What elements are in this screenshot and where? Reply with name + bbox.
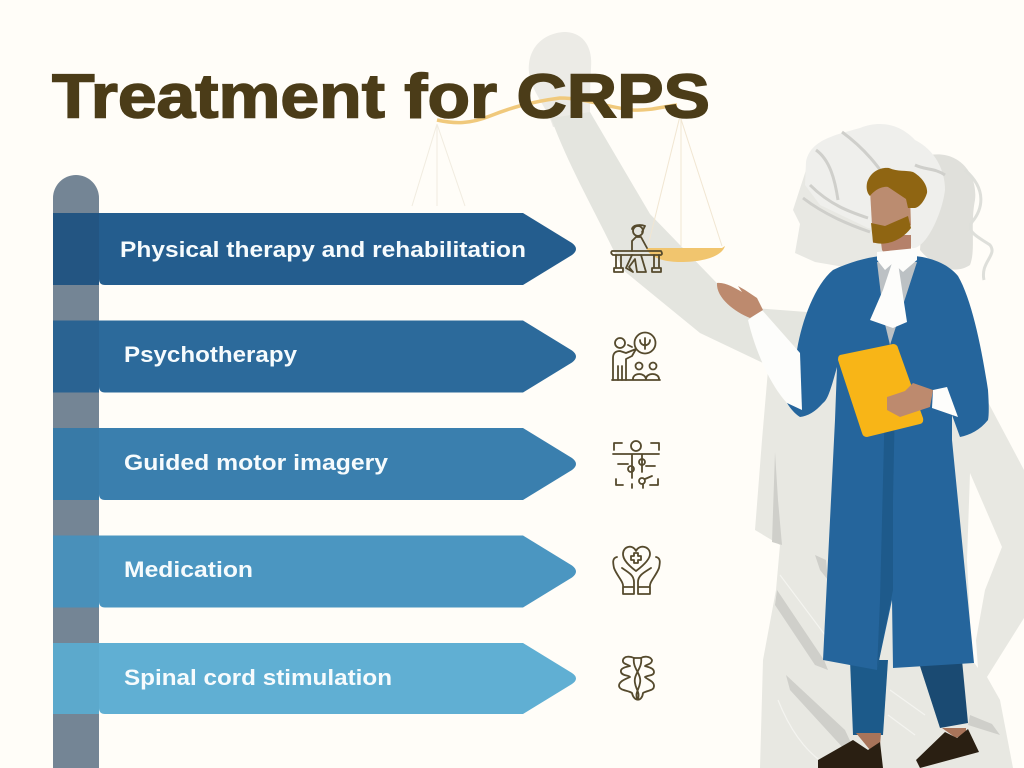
icon: psychotherapy group	[612, 332, 660, 380]
arrow: physical therapy: Physical therapy and rehabilitation	[120, 237, 526, 262]
statue hair strands	[803, 132, 945, 232]
balance scale	[412, 98, 725, 262]
left sleeve cuff	[748, 310, 802, 410]
icon: guided motor imagery body scan	[613, 441, 659, 488]
raised hand	[717, 283, 763, 318]
left shoe	[818, 740, 883, 768]
hand on folder	[887, 383, 933, 417]
signpost pole	[53, 175, 99, 768]
arrow: spinal cord stimulation	[53, 643, 576, 714]
scale beam	[437, 98, 677, 123]
right scale chains	[648, 116, 722, 246]
statue raised hand	[529, 32, 591, 127]
arrow: medication: Medication	[124, 557, 253, 582]
shirt	[877, 262, 917, 345]
statue robe folds	[772, 452, 1000, 750]
statue face	[793, 170, 900, 268]
neck	[880, 235, 911, 262]
left scale chains	[412, 124, 465, 206]
trouser legs	[850, 660, 888, 735]
arrow: guided motor imagery: Guided motor imagery	[124, 450, 389, 475]
right shoe	[916, 729, 979, 768]
arrow: medication	[53, 536, 576, 608]
coat	[787, 256, 989, 670]
jabot	[870, 263, 907, 328]
statue ponytail	[920, 154, 975, 270]
right scale pan	[646, 246, 725, 262]
gap between statue hip arm and body	[967, 473, 1002, 668]
yellow folder	[838, 344, 923, 437]
statue hair	[805, 124, 945, 248]
arrow: psychotherapy: Psychotherapy	[124, 342, 298, 367]
arrow: spinal cord stimulation: Spinal cord stimulation	[124, 665, 392, 690]
face	[870, 187, 911, 243]
arrow: guided motor imagery	[53, 428, 576, 500]
statue body and robe	[755, 300, 1024, 768]
arrow: psychotherapy	[53, 320, 576, 392]
title: Treatment for CRPS	[52, 62, 710, 132]
statue curl	[965, 170, 992, 280]
statue of justice background	[529, 32, 1024, 768]
ankles	[856, 728, 966, 750]
hair	[867, 168, 927, 208]
statue robe drape lines	[778, 575, 925, 762]
statue raised arm	[551, 112, 835, 400]
icon: hands holding heart	[613, 547, 660, 594]
beard	[871, 216, 911, 244]
lawyer figure	[717, 168, 989, 768]
arrow: physical therapy	[53, 213, 576, 285]
icon: spine	[619, 657, 654, 700]
collar	[877, 248, 917, 272]
coat centre fold	[877, 400, 895, 670]
right cuff	[932, 387, 958, 417]
icon: physical therapy walking bars	[611, 225, 662, 272]
